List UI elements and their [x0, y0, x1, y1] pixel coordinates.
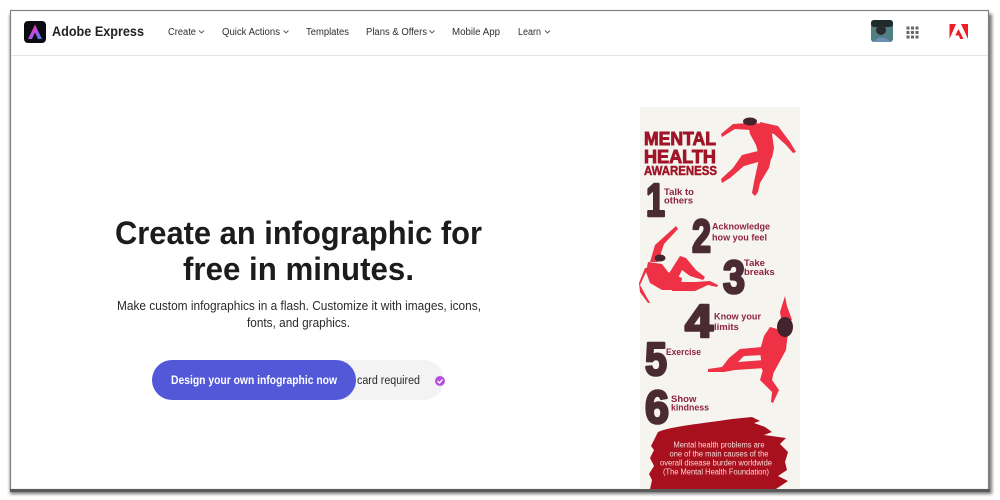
button: design your own infographic: Design your own infographic now	[171, 375, 337, 387]
step 5: exercise	[645, 333, 701, 385]
step 6: show kindness: Show	[671, 394, 697, 405]
poster title: AWARENESS	[644, 163, 717, 178]
call to action group	[152, 360, 445, 400]
figure: reclining person	[639, 226, 718, 303]
step 3: take breaks	[723, 251, 775, 303]
step 6: show kindness	[645, 381, 709, 433]
menu item: Learn: Learn	[518, 27, 541, 38]
step 6: show kindness: kindness	[671, 402, 709, 414]
step 2: acknowledge how you feel: Acknowledge	[712, 222, 770, 232]
callout: brush stroke statistic: one of the main causes of the	[670, 450, 769, 458]
callout: brush stroke statistic: Mental health problems are	[674, 440, 765, 450]
poster title	[644, 129, 717, 178]
poster title: HEALTH	[644, 147, 716, 167]
icon: Adobe Express logo	[24, 21, 46, 43]
panel: mental health infographic poster	[639, 107, 800, 489]
icon: user avatar	[871, 20, 893, 42]
button: design your own infographic	[152, 360, 356, 400]
icon: purple check	[435, 376, 445, 386]
figure: stretching person	[708, 296, 793, 403]
hero description	[117, 298, 481, 330]
step 4: know your limits: 4	[685, 295, 713, 347]
step 2: acknowledge how you feel	[692, 210, 770, 262]
figure: leaping person	[721, 118, 796, 196]
icon: apps grid	[906, 26, 918, 38]
menu item: Plans & Offers: Plans & Offers	[366, 27, 427, 38]
hero description: Make custom infographics in a flash. Customize it with images, icons,	[117, 298, 481, 313]
step 6: show kindness: 6	[645, 381, 669, 433]
step 1: talk to others	[646, 174, 694, 226]
no credit card pill: card required	[357, 375, 420, 387]
callout: brush stroke statistic: overall disease burden worldwide	[660, 458, 773, 468]
step 5: exercise: Exercise	[666, 347, 701, 358]
step 1: talk to others: Talk to	[664, 187, 694, 198]
navigation bar	[11, 20, 988, 56]
menu item: Quick Actions: Quick Actions	[222, 27, 280, 38]
step 5: exercise: 5	[645, 333, 667, 385]
callout: brush stroke statistic: (The Mental Health Foundation)	[663, 468, 769, 476]
step 4: know your limits: Know your	[714, 312, 761, 322]
hero description: fonts, and graphics.	[247, 315, 350, 330]
hero heading: free in minutes.	[183, 251, 414, 287]
step 4: know your limits	[685, 295, 761, 347]
menu item: Mobile App: Mobile App	[452, 27, 500, 38]
hero heading: Create an infographic for	[115, 215, 482, 251]
menu item: Templates: Templates	[306, 27, 349, 38]
step 1: talk to others: others	[664, 196, 693, 206]
brand name: Adobe Express	[52, 23, 144, 39]
step 4: know your limits: limits	[714, 322, 739, 333]
step 1: talk to others: 1	[646, 174, 665, 226]
menu item: Create: Create	[168, 27, 196, 38]
step 2: acknowledge how you feel: how you feel	[712, 232, 767, 244]
poster title: MENTAL	[644, 129, 716, 149]
step 3: take breaks: 3	[723, 251, 745, 303]
icon: Adobe logo	[950, 24, 968, 39]
callout: brush stroke statistic	[649, 417, 788, 489]
no credit card pill	[300, 360, 444, 400]
step 3: take breaks: Take	[744, 258, 765, 269]
step 3: take breaks: breaks	[744, 267, 775, 278]
hero heading	[115, 215, 482, 287]
step 2: acknowledge how you feel: 2	[692, 210, 711, 262]
